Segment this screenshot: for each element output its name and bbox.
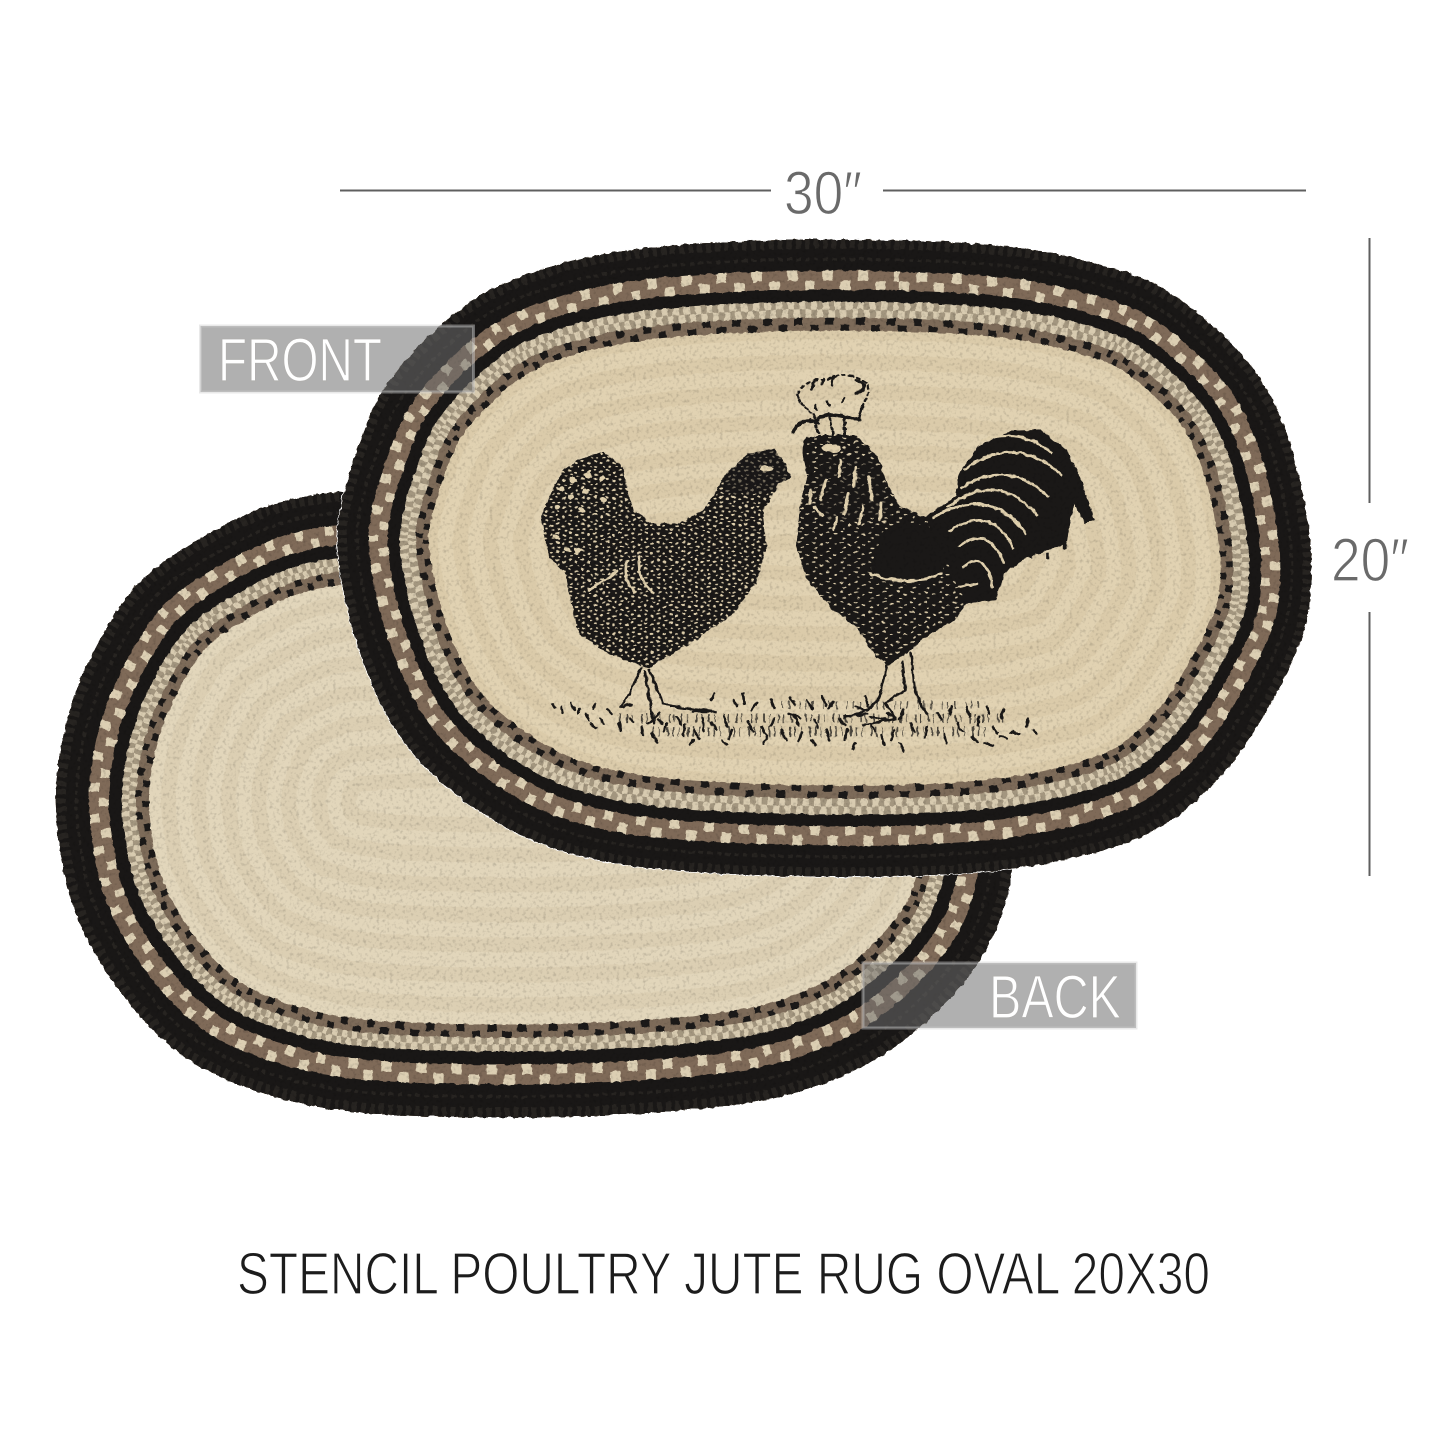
label: BACK: BACK <box>989 963 1121 1031</box>
label: FRONT: FRONT <box>218 326 382 394</box>
dimension: height 20 inches: 20″ <box>1331 526 1409 594</box>
hen <box>541 448 791 723</box>
grass under the birds <box>552 693 1036 751</box>
product title caption: STENCIL POULTRY JUTE RUG OVAL 20X30 <box>237 1241 1210 1307</box>
rug: back view <box>56 488 1015 1118</box>
rug: front view <box>337 240 1311 876</box>
stencil artwork: hen and rooster <box>541 375 1094 751</box>
dimension: width 30 inches: 30″ <box>784 159 862 227</box>
label: BACK <box>863 963 1136 1031</box>
infographic canvas <box>55 172 1408 1294</box>
rooster <box>793 375 1094 725</box>
